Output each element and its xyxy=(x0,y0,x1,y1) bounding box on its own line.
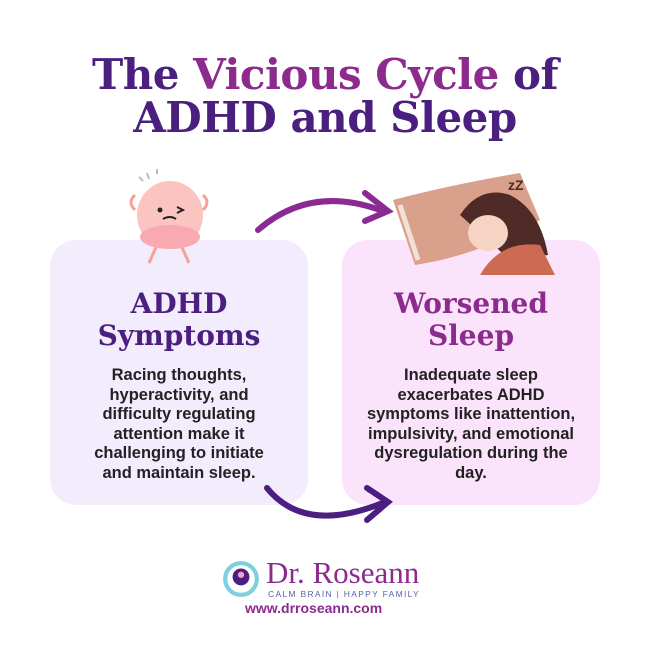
panel: ADHD symptoms xyxy=(50,240,308,505)
text: symptoms description xyxy=(94,366,264,482)
icon: sleeping girl xyxy=(393,173,555,275)
text: sleep description: day. xyxy=(455,464,487,482)
heading: ADHD Symptoms: Symptoms xyxy=(98,319,260,352)
heading: Worsened Sleep: Worsened xyxy=(394,287,548,320)
logo xyxy=(223,555,420,616)
text: sleep description xyxy=(367,366,575,482)
text: symptoms description: difficulty regulating xyxy=(102,405,256,423)
text: symptoms description: challenging to initiate xyxy=(94,444,264,462)
title: The Vicious Cycle of xyxy=(92,50,558,99)
arrow: top xyxy=(255,190,394,233)
heading: ADHD Symptoms: ADHD xyxy=(131,287,227,320)
title: ADHD and Sleep xyxy=(133,93,517,142)
panel: worsened sleep xyxy=(342,240,600,505)
text: symptoms description: and maintain sleep. xyxy=(102,464,256,482)
heading: Worsened Sleep: Sleep xyxy=(428,319,514,352)
text: tagline: CALM BRAIN | HAPPY FAMILY xyxy=(268,589,420,599)
title xyxy=(92,50,561,142)
text: sleep description: dysregulation during the xyxy=(374,444,568,462)
icon: brain character xyxy=(130,169,208,264)
text: website: www.drroseann.com xyxy=(245,600,382,616)
text: sleep description: symptoms like inattention, xyxy=(367,405,575,423)
heading: ADHD Symptoms xyxy=(98,287,260,352)
icon: logo head xyxy=(223,561,259,597)
text: sleep description: Inadequate sleep xyxy=(404,366,538,384)
heading: Worsened Sleep xyxy=(394,287,548,352)
text: symptoms description: hyperactivity, and xyxy=(109,386,249,404)
text: sleep description: impulsivity, and emotional xyxy=(368,424,574,442)
text: brand name: Dr. Roseann xyxy=(266,555,419,590)
text: symptoms description: Racing thoughts, xyxy=(112,366,246,384)
icon: sleeping girl: zZ xyxy=(508,177,524,193)
text: sleep description: exacerbates ADHD xyxy=(397,386,545,404)
text: symptoms description: attention make it xyxy=(113,424,245,442)
arrow: bottom xyxy=(264,485,393,523)
